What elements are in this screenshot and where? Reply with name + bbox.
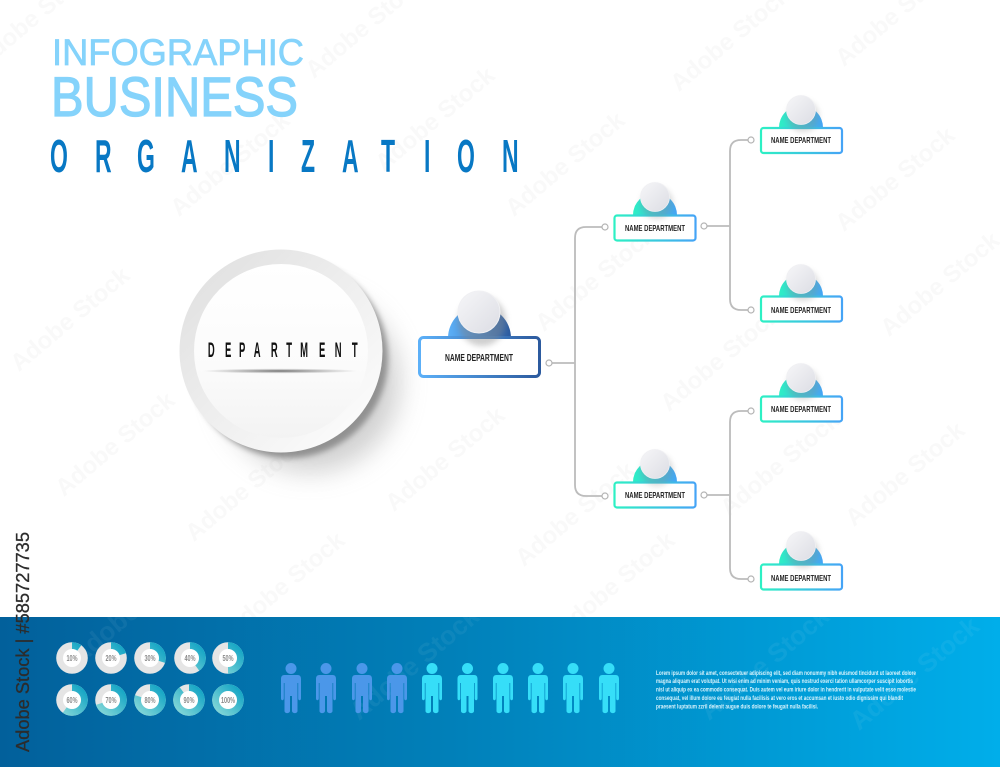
label box [420,338,540,376]
footer watermark: Adobe Stock [694,600,835,726]
title line: organization: ORGANIZATION [50,130,519,182]
node: level two top: NAME DEPARTMENT [625,223,686,233]
node: level two top [614,182,696,240]
lorem ipsum paragraph: Lorem ipsum dolor sit amet, consectetuer adipiscing elit, sed diam nonummy nibh euismod tincidunt ut laoreet dolore [656,671,917,677]
node: level three fourth [761,532,842,590]
ring 80% [134,684,166,716]
ring 40%: 40% [184,654,196,663]
ring 20% [95,642,127,674]
blue people [281,663,407,713]
lorem ipsum paragraph: consequat, vel illum dolore eu feugiat nulla facilisis at vero eros et accumsan et iusto odio dignissim qui blandit [656,696,903,702]
watermark: Adobe Stock [655,301,786,417]
percentage rings [56,642,244,716]
main department circle [180,250,400,472]
cyan people [422,663,619,713]
node: level three third [761,364,842,422]
node: level three second [761,264,842,322]
node: level three first: NAME DEPARTMENT [771,135,832,145]
title [50,32,519,182]
lorem ipsum paragraph: praesent luptatum zzril delenit augue duis dolore te feugait nulla facilisi. [656,704,818,710]
footer watermark: Adobe [64,596,145,671]
watermark: Adobe Stock [840,416,971,532]
lorem ipsum paragraph [656,671,917,710]
ring 60%: 60% [66,696,78,705]
ring 10%: 10% [66,654,78,663]
inner face [194,264,368,438]
node: level three third: NAME DEPARTMENT [771,404,832,414]
ring 100% [212,684,244,716]
node label: NAME DEPARTMENT [445,353,513,364]
lorem ipsum paragraph: nisl ut aliquip ex ea commodo consequat. Duis autem vel eum iriure dolor in hendrerit in vulputate velit esse molestie [656,688,917,694]
watermark: Adobe Stock [220,526,351,642]
ring 90% [173,684,205,716]
ring 100%: 100% [221,696,235,705]
people pictogram row [281,663,619,713]
watermark: Adobe Stock [5,261,136,377]
watermark: Adobe Stock [530,221,661,337]
watermark: Adobe Stock [165,106,296,222]
node: level three second: NAME DEPARTMENT [771,305,832,315]
ring 30%: 30% [144,654,156,663]
title line: business: BUSINESS [51,65,298,128]
watermark: Adobe Stock [510,456,641,572]
watermark: Adobe Stock [370,61,501,177]
circle shadow [220,292,400,472]
circle contact shadow [188,258,388,458]
ring 90%: 90% [184,696,194,705]
main node [420,291,540,376]
divider shadow [202,368,358,374]
node: level two bottom: NAME DEPARTMENT [625,490,686,500]
stock id sidebar text: Adobe Stock | #585727735 [13,532,33,752]
footer watermark: Adobe Stock [844,610,985,736]
ring 70%: 70% [106,696,116,705]
watermark: Adobe Stock [830,121,961,237]
ring 20%: 20% [106,654,116,663]
ring 10% [56,642,88,674]
ring 80%: 80% [144,696,156,705]
watermark: Adobe Stock [715,406,846,522]
ring 30% [134,642,166,674]
ring 40% [174,642,206,674]
ring 70% [95,684,127,716]
node: level two bottom [614,450,696,508]
node: level three first [761,96,842,153]
disc [458,291,500,333]
dome [448,307,511,338]
disc shadow [458,296,506,346]
outer rim [180,250,382,452]
watermark: Adobe Stock [180,431,311,547]
node: level three fourth: NAME DEPARTMENT [771,573,832,583]
footer band [0,617,1000,767]
footer watermark: Adobe Stock [344,600,485,726]
connector lines [546,137,754,582]
watermark: Adobe Stock [380,401,511,517]
ring 50%: 50% [222,654,234,663]
department label: DEPARTMENT [208,339,358,362]
ring 60% [56,684,88,716]
watermark: Adobe Stock [500,106,631,222]
watermark: Adobe Stock [550,526,681,642]
ring 50% [212,642,244,674]
footer watermark [64,596,985,736]
title line: infographic: INFOGRAPHIC [52,32,304,73]
lorem ipsum paragraph: magna aliquam erat volutpat. Ut wisi enim ad minim veniam, quis nostrud exerci tation ullamcorper suscipit lobortis [656,679,914,685]
watermark: Adobe Stock [50,386,181,502]
